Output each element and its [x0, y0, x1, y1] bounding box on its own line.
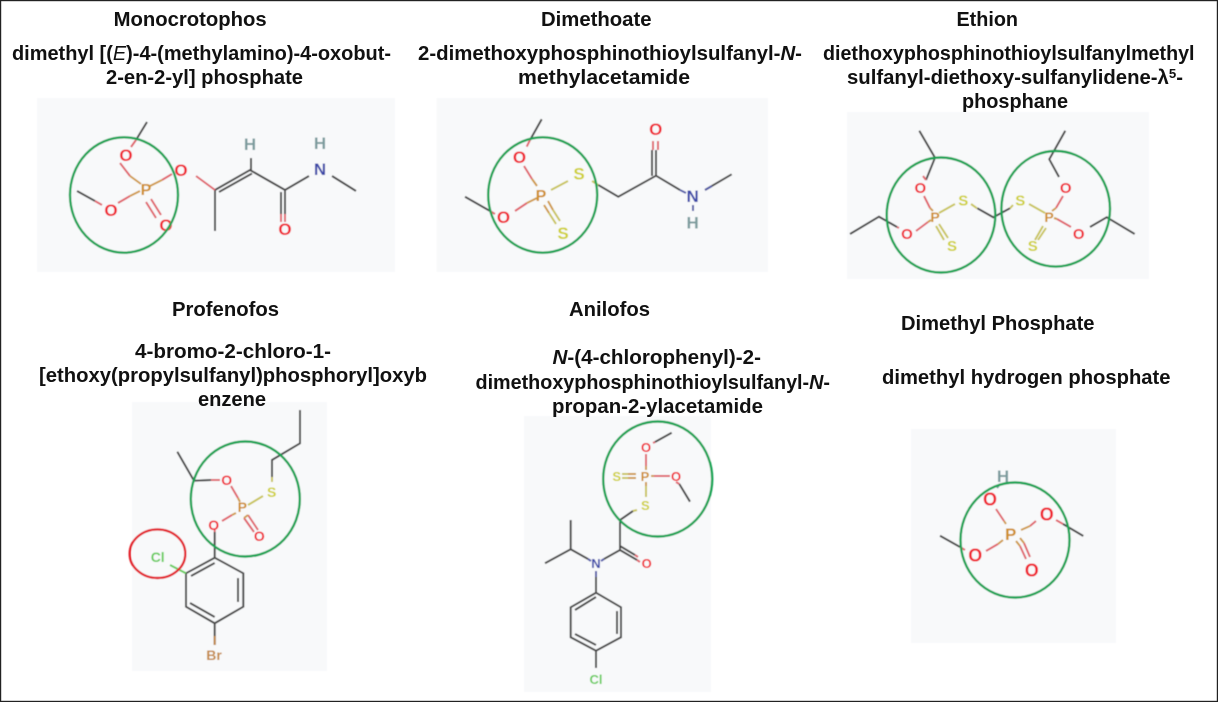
chart: Monocrotophos structure: O: [104, 201, 118, 220]
chart: Ethion structure: P: [1044, 209, 1054, 225]
heading: Anilofos: Anilofos: [569, 299, 650, 321]
panel: Monocrotophos: [12, 9, 395, 272]
chart: Dimethyl Phosphate structure: O: [983, 490, 997, 510]
chart: Monocrotophos structure: H: [314, 134, 326, 153]
chart: Anilofos structure: O: [642, 556, 652, 571]
text: Profenofos IUPAC name: [ethoxy(propylsulfanyl)phosphoryl]oxyb: [39, 365, 427, 387]
chart: Ethion structure: O: [901, 226, 913, 243]
chart: Dimethyl Phosphate structure: [911, 429, 1116, 643]
chart: Dimethoate structure: [437, 98, 768, 272]
chart: Ethion structure: P: [930, 209, 940, 225]
chart: Ethion structure: O: [1073, 226, 1085, 243]
text: Anilofos IUPAC name: [476, 347, 830, 418]
chart: Dimethoate structure: S: [557, 224, 569, 243]
chart: Ethion structure: [847, 112, 1149, 279]
text: Dimethoate IUPAC name: 2-dimethoxyphosphinothioylsulfanyl- N-: [418, 43, 802, 65]
chart: Ethion structure: S: [1028, 238, 1038, 255]
text: Dimethoate IUPAC name: [418, 43, 802, 89]
heading: Ethion: Ethion: [956, 9, 1018, 31]
text: Ethion IUPAC name: sulfanyl-diethoxy-sulfanylidene-λ: [847, 67, 1164, 89]
chart: Anilofos structure: P: [641, 469, 650, 484]
chart: Profenofos structure: [130, 402, 327, 671]
chart: Profenofos structure: S: [267, 484, 276, 500]
chart: Anilofos structure: O: [641, 440, 651, 455]
chart: Anilofos structure: O: [671, 469, 681, 484]
chart: Monocrotophos structure: N: [314, 160, 326, 179]
heading: Dimethyl Phosphate: Dimethyl Phosphate: [901, 313, 1094, 335]
chart: Dimethoate structure: N: [687, 187, 699, 206]
panel: Anilofos: [476, 299, 830, 692]
chart: Monocrotophos structure: O: [119, 146, 133, 165]
text: Profenofos IUPAC name: 4-bromo-2-chloro-1-: [135, 341, 331, 363]
text: Ethion IUPAC name: [823, 43, 1194, 113]
text: Anilofos IUPAC name: dimethoxyphosphinothioylsulfanyl-N-: [476, 372, 830, 394]
chart: Monocrotophos structure: O: [159, 216, 173, 235]
chart: Ethion structure: O: [1060, 180, 1072, 197]
panel: Dimethoate: [418, 9, 802, 272]
text: Ethion IUPAC name: 5: [1169, 66, 1176, 81]
text: Dimethyl Phosphate IUPAC name: dimethyl hydrogen phosphate: [882, 367, 1170, 389]
chart: Profenofos structure: Cl: [151, 549, 165, 565]
text: Dimethoate IUPAC name: methylacetamide: [518, 67, 690, 89]
chart: Monocrotophos structure: [37, 98, 395, 272]
panel: Ethion: [823, 9, 1194, 279]
chart: Profenofos structure: O: [208, 517, 219, 533]
chart: Dimethoate structure: O: [497, 208, 510, 227]
heading: Profenofos: Profenofos: [172, 299, 279, 321]
chart: Anilofos structure: Cl: [590, 672, 602, 687]
text: Anilofos IUPAC name: N-(4-chlorophenyl)-2-: [552, 347, 761, 369]
chart: Profenofos structure: O: [254, 528, 265, 544]
chart: Monocrotophos structure: O: [278, 220, 292, 239]
panel: Dimethyl Phosphate: [882, 313, 1170, 643]
heading: Monocrotophos: Monocrotophos: [114, 9, 267, 31]
chart: Dimethoate structure: S: [573, 164, 585, 184]
chart: Monocrotophos structure: H: [244, 135, 256, 154]
text: Monocrotophos IUPAC name: [12, 43, 391, 89]
chart: Ethion structure: S: [958, 192, 968, 210]
chart: Ethion structure: O: [914, 180, 926, 197]
text: Profenofos IUPAC name: [39, 341, 427, 411]
chart: Anilofos structure: S: [612, 469, 621, 484]
chart: Profenofos structure: O: [221, 472, 232, 488]
text: Ethion IUPAC name: -: [1176, 67, 1183, 89]
chart: Dimethyl Phosphate structure: H: [997, 467, 1009, 486]
chart: Dimethyl Phosphate structure: P: [1005, 525, 1016, 544]
chart: Dimethyl Phosphate structure: O: [1025, 560, 1039, 580]
text: Monocrotophos IUPAC name: 2-en-2-yl] phosphate: [106, 67, 303, 89]
chart: Dimethoate structure: O: [649, 120, 662, 139]
chart: Anilofos structure: [524, 416, 712, 692]
text: Anilofos IUPAC name: propan-2-ylacetamide: [552, 396, 763, 418]
text: Profenofos IUPAC name: enzene: [198, 389, 266, 411]
panel: Profenofos: [39, 299, 427, 671]
text: Ethion IUPAC name: phosphane: [962, 91, 1068, 113]
chlorine highlight circle: [130, 529, 185, 578]
chart: Monocrotophos structure: P: [141, 182, 152, 199]
chart: Dimethyl Phosphate structure: O: [1040, 504, 1054, 524]
chart: Anilofos structure: S: [641, 498, 650, 513]
chart: Dimethyl Phosphate structure: O: [968, 546, 982, 566]
chart: Ethion structure: S: [947, 238, 957, 255]
heading: Dimethoate: Dimethoate: [541, 9, 652, 31]
highlight circles: [887, 151, 1110, 272]
text: Monocrotophos IUPAC name: dimethyl [(E)-4-(methylamino)-4-oxobut-: [12, 43, 391, 65]
chart: Monocrotophos structure: O: [174, 161, 188, 180]
text: Ethion IUPAC name: diethoxyphosphinothioylsulfanylmethyl: [823, 43, 1194, 65]
chart: Dimethoate structure: O: [513, 148, 526, 167]
chart: Profenofos structure: P: [238, 499, 247, 515]
chart: Dimethoate structure: H: [687, 214, 699, 232]
chart: Dimethoate structure: P: [536, 188, 547, 205]
chart: Profenofos structure: Br: [206, 647, 222, 663]
chart: Ethion structure: S: [1015, 192, 1025, 210]
chart: Anilofos structure: N: [591, 556, 601, 571]
